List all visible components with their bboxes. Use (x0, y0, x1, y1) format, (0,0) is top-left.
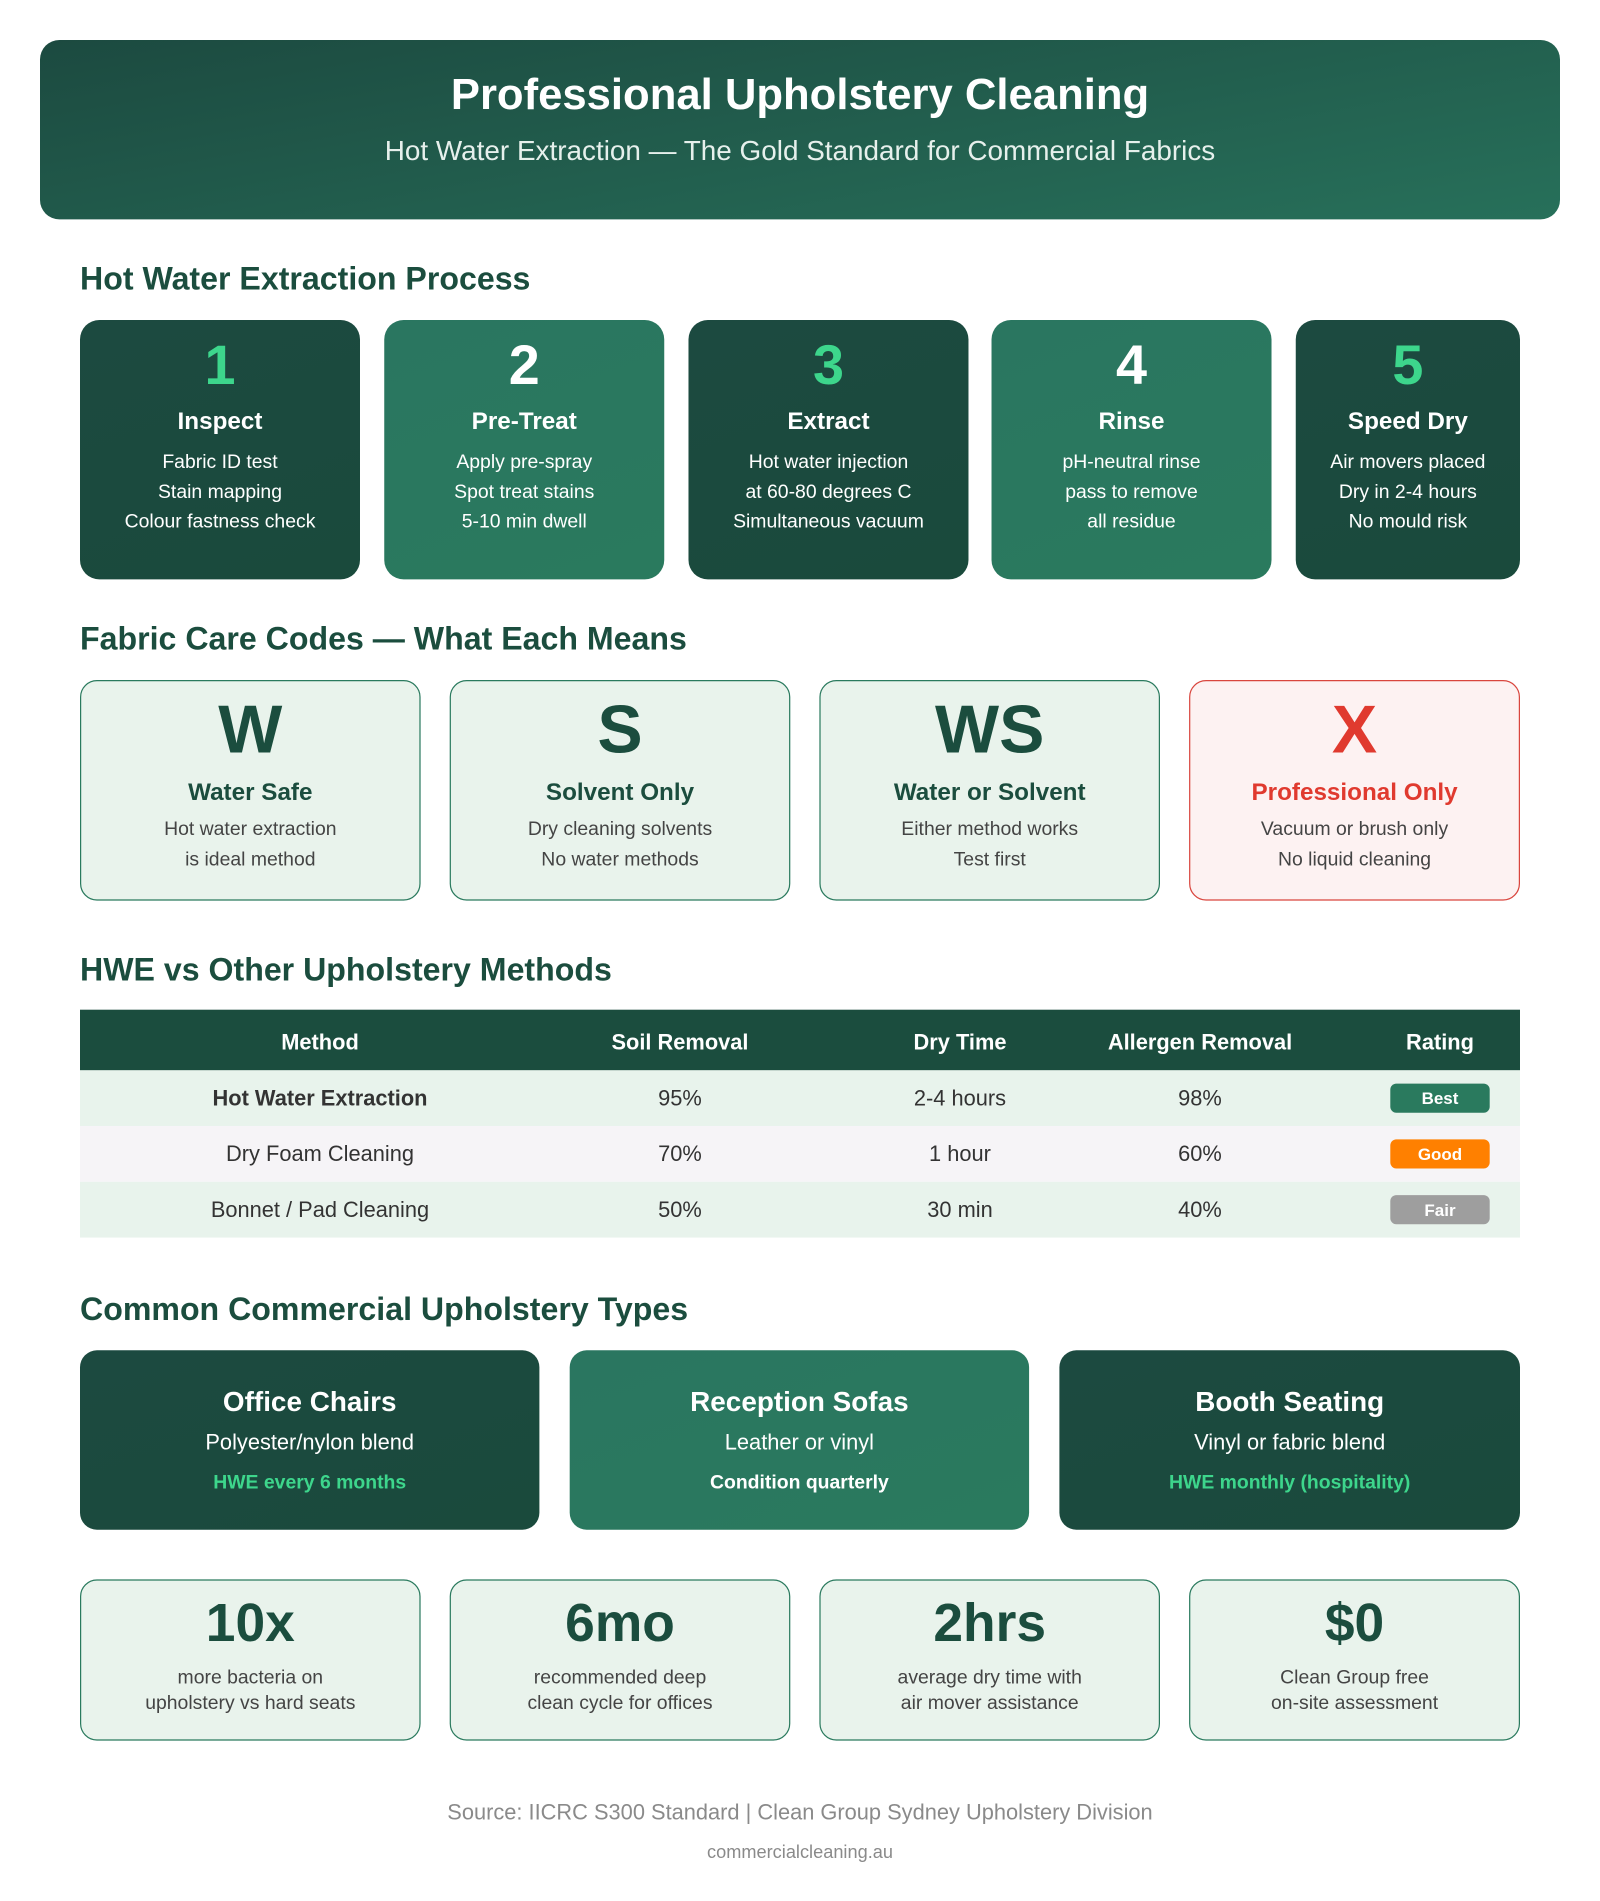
heading: process: Hot Water Extraction Process (80, 261, 530, 297)
comparison table: Method (281, 1030, 359, 1055)
title: Professional Upholstery Cleaning (451, 69, 1149, 119)
step 2: Spot treat stains (454, 482, 594, 502)
code WS: Test first (954, 849, 1026, 870)
type: office chairs (80, 1350, 539, 1530)
step 3: Hot water injection (749, 452, 908, 473)
code WS (819, 680, 1160, 901)
step 1: 1 (204, 333, 236, 396)
code S: S (597, 691, 643, 767)
footer url: commercialcleaning.au (707, 1842, 893, 1863)
stat 10x: upholstery vs hard seats (145, 1693, 355, 1714)
code W (80, 680, 421, 901)
code S: Dry cleaning solvents (528, 819, 712, 840)
comparison table: Good (1418, 1144, 1462, 1164)
comparison table: Allergen Removal (1108, 1030, 1292, 1055)
code X: No liquid cleaning (1278, 849, 1431, 870)
step 3: Extract (787, 408, 870, 435)
step 3: at 60-80 degrees C (745, 482, 911, 502)
step 2: Apply pre-spray (456, 452, 592, 473)
code X: Professional Only (1251, 779, 1458, 806)
comparison table: 70% (658, 1142, 702, 1166)
code X: Vacuum or brush only (1261, 819, 1448, 840)
comparison table: Soil Removal (611, 1030, 749, 1055)
stat 6mo: recommended deep (534, 1668, 706, 1688)
step 1 (80, 320, 360, 579)
type: booth seating (1059, 1350, 1520, 1530)
step 5: Speed Dry (1348, 408, 1468, 435)
comparison table: 2-4 hours (914, 1086, 1006, 1110)
type: reception sofas: Condition quarterly (710, 1473, 889, 1493)
heading: comparison: HWE vs Other Upholstery Methods (80, 952, 612, 988)
stat 2hrs: air mover assistance (901, 1693, 1079, 1714)
step 5: 5 (1392, 333, 1423, 396)
step 1: Inspect (178, 408, 262, 435)
code WS: Water or Solvent (894, 779, 1086, 806)
comparison table: Bonnet / Pad Cleaning (211, 1198, 429, 1222)
comparison table: Hot Water Extraction (212, 1086, 427, 1110)
stat 2hrs (819, 1579, 1160, 1741)
type: office chairs: Office Chairs (223, 1385, 396, 1417)
code WS: Either method works (901, 819, 1078, 840)
stat 10x (80, 1579, 421, 1741)
step 3: 3 (813, 333, 844, 396)
code WS: WS (935, 691, 1044, 767)
type: office chairs: Polyester/nylon blend (205, 1430, 414, 1455)
stat $0 (1189, 1579, 1520, 1741)
heading: care codes: Fabric Care Codes — What Each Means (80, 621, 687, 657)
step 4: pass to remove (1065, 482, 1198, 502)
type: reception sofas: Reception Sofas (690, 1385, 909, 1417)
step 2 (384, 320, 664, 579)
code S: Solvent Only (546, 779, 694, 806)
comparison table: 95% (658, 1086, 702, 1110)
step 1: Fabric ID test (162, 452, 278, 473)
code W: is ideal method (185, 849, 316, 870)
subtitle: Hot Water Extraction — The Gold Standard for Commercial Fabrics (385, 135, 1215, 166)
step 1: Colour fastness check (125, 512, 315, 532)
step 1: Stain mapping (158, 482, 282, 502)
comparison table (80, 1010, 1520, 1238)
comparison table: Dry Time (914, 1030, 1006, 1055)
type: booth seating: HWE monthly (hospitality) (1169, 1473, 1410, 1493)
type: booth seating: Vinyl or fabric blend (1194, 1430, 1385, 1455)
type: office chairs: HWE every 6 months (213, 1473, 406, 1493)
step 3 (688, 320, 968, 579)
step 4 (992, 320, 1272, 579)
comparison table: 40% (1178, 1198, 1222, 1222)
step 2: 2 (509, 333, 540, 396)
step 5 (1296, 320, 1520, 579)
step 2: Pre-Treat (472, 408, 577, 435)
stat $0: Clean Group free (1280, 1668, 1429, 1688)
comparison table: 30 min (927, 1198, 993, 1222)
comparison table: 60% (1178, 1142, 1222, 1166)
code W: W (218, 691, 282, 767)
stat 2hrs: 2hrs (933, 1594, 1046, 1653)
stat 6mo: 6mo (565, 1594, 675, 1653)
step 5: Air movers placed (1330, 452, 1485, 473)
heading: types: Common Commercial Upholstery Types (80, 1291, 688, 1327)
step 3: Simultaneous vacuum (733, 512, 924, 532)
stat 10x: more bacteria on (178, 1668, 323, 1688)
code X: X (1332, 691, 1377, 767)
stat 2hrs: average dry time with (898, 1668, 1082, 1688)
type: booth seating: Booth Seating (1195, 1385, 1384, 1417)
footer source: Source: IICRC S300 Standard | Clean Group Sydney Upholstery Division (447, 1800, 1153, 1824)
stat 10x: 10x (206, 1594, 295, 1653)
stat $0: on-site assessment (1271, 1693, 1438, 1714)
stat $0: $0 (1325, 1594, 1384, 1653)
stat 6mo (450, 1579, 790, 1741)
step 4: 4 (1116, 333, 1147, 396)
type: reception sofas (570, 1350, 1029, 1530)
comparison table: 50% (658, 1198, 702, 1222)
code W: Water Safe (188, 779, 312, 806)
comparison table: Rating (1406, 1030, 1474, 1055)
comparison table: 1 hour (929, 1142, 991, 1166)
comparison table: Best (1422, 1088, 1458, 1108)
step 5: Dry in 2-4 hours (1339, 482, 1477, 502)
header banner (40, 40, 1560, 219)
code X (1189, 680, 1520, 901)
step 4: all residue (1087, 512, 1176, 532)
code S (450, 680, 790, 901)
comparison table: 98% (1178, 1086, 1222, 1110)
step 4: Rinse (1099, 408, 1165, 435)
type: reception sofas: Leather or vinyl (725, 1430, 874, 1455)
code W: Hot water extraction (164, 819, 337, 840)
comparison table: Dry Foam Cleaning (226, 1142, 414, 1166)
code S: No water methods (541, 849, 699, 870)
step 5: No mould risk (1349, 512, 1467, 532)
step 2: 5-10 min dwell (462, 512, 587, 532)
comparison table: Fair (1424, 1200, 1456, 1219)
stat 6mo: clean cycle for offices (527, 1693, 713, 1714)
step 4: pH-neutral rinse (1063, 452, 1200, 473)
